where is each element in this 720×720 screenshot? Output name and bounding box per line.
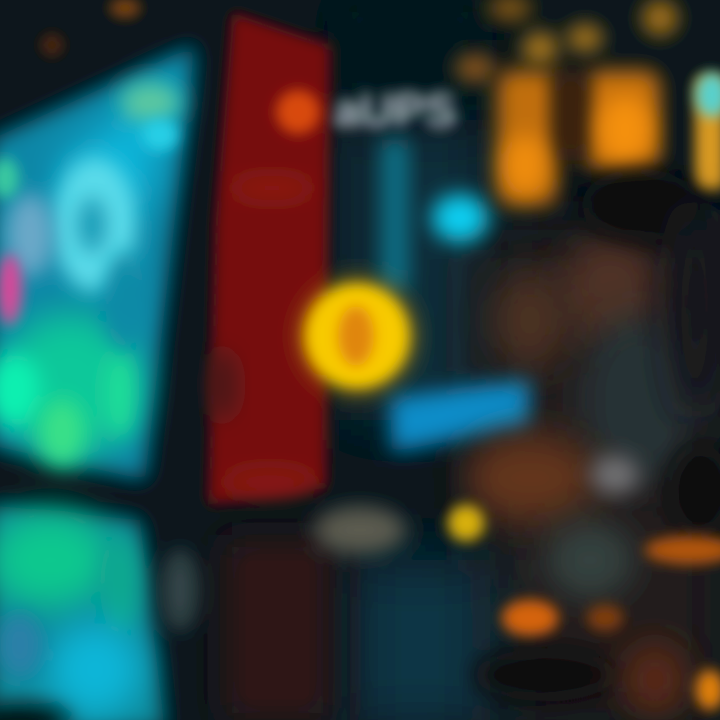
panel: glowing screen (0, 45, 195, 480)
person silhouette (464, 169, 720, 600)
dark reflection below banner (162, 535, 335, 720)
brand logo (276, 84, 456, 136)
panel: red banner (208, 12, 330, 505)
blue panel (390, 378, 530, 452)
brand logo: aUPS (334, 84, 456, 136)
panel: screen reflection (0, 505, 165, 720)
orange lights (40, 0, 720, 205)
icon: gold coin (295, 274, 419, 398)
neon cyan column and light (382, 140, 488, 290)
desk objects and lights (314, 505, 720, 718)
